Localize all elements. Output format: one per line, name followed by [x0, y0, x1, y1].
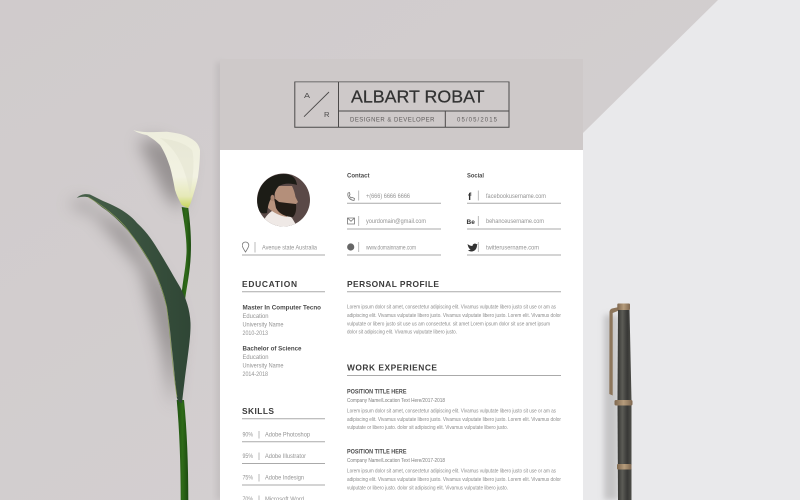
job two: adipiscing elit. Vivamus vulputate libero justo. Vivamus vulputate libero justo. Lorem elit. Vivamus dolor [347, 477, 561, 483]
date: 05/05/2015 [457, 118, 498, 124]
pen lower band [617, 464, 632, 470]
contact column [347, 172, 441, 255]
job one: POSITION TITLE HERE [347, 388, 406, 395]
degree two [242, 345, 302, 378]
facebook row [467, 190, 561, 203]
monogram slash [304, 92, 329, 117]
pen shadow [604, 315, 618, 500]
skill: photoshop: Adobe Photoshop [265, 431, 311, 438]
degree one: 2010-2013 [242, 330, 268, 337]
degree two: University Name [242, 362, 284, 370]
job two: Lorem ipsum dolor sit amet, consectetur adipiscing elit. Vivamus vulputate libero justo sit use or am as [347, 469, 556, 475]
skill: indesign: 75% [242, 475, 253, 482]
profile heading: PERSONAL PROFILE [347, 279, 439, 289]
address divider [254, 242, 256, 252]
icon: facebook: f [468, 192, 472, 203]
lily blossom fold [160, 138, 193, 195]
skills heading: SKILLS [242, 406, 274, 416]
degree two: Education [242, 354, 269, 361]
degree two: Bachelor of Science [242, 345, 302, 352]
social heading: Social [467, 172, 484, 180]
job two [347, 449, 561, 491]
pen body [618, 309, 632, 500]
lily leaf rim [88, 197, 177, 397]
lily stem lower [177, 400, 188, 500]
resume sheet [216, 59, 583, 500]
icon: map pin [242, 242, 249, 252]
profile paragraph: vulputate or libero justo sit use us am consectetur. sit amet Lorem ipsum dolor sit use amet ipsum [347, 321, 550, 327]
lily leaf [77, 194, 191, 403]
address text: Avenue state Australia [262, 244, 317, 252]
neck [268, 198, 287, 217]
icon: phone [348, 192, 354, 200]
degree one: Master In Computer Tecno [242, 304, 321, 311]
personal profile section [347, 279, 561, 336]
icon: twitter [468, 244, 478, 252]
skill: indesign: Adobe Indesign [265, 475, 304, 482]
face [274, 186, 298, 204]
skill: word [242, 496, 305, 500]
job two: POSITION TITLE HERE [347, 449, 406, 456]
skill: photoshop [242, 431, 325, 442]
contact heading: Contact [347, 172, 370, 180]
work experience section [347, 362, 561, 491]
degree two: 2014-2018 [242, 371, 268, 378]
shoulder [264, 211, 296, 226]
website: www.domainname.com [365, 244, 416, 252]
job one: Lorem ipsum dolor sit amet, consectetur adipiscing elit. Vivamus vulputate libero justo sit use or am as [347, 408, 556, 414]
degree one: University Name [242, 322, 284, 328]
job one: Company Name/Location Text Here/2017-2018 [347, 398, 445, 404]
pen [604, 304, 632, 500]
plate frame [295, 82, 509, 127]
behance row [466, 216, 561, 229]
job one [347, 388, 561, 431]
education section [242, 279, 325, 378]
twitter name: twitterusername.com [486, 244, 539, 252]
lily blossom [133, 130, 200, 208]
lily stem upper [181, 207, 191, 304]
profile paragraph: dolor sit adipiscing elit. Vivamus vulputate libero justo. [347, 330, 457, 336]
icon: globe [347, 243, 354, 251]
pen clip [609, 307, 619, 396]
skill: photoshop: 90% [242, 431, 253, 438]
sheet shadow [216, 62, 224, 500]
monogram R: R [324, 112, 330, 119]
beard [274, 198, 296, 217]
sheet body [220, 59, 583, 500]
address row [242, 242, 325, 255]
job one: adipiscing elit. Vivamus vulputate libero justo. Vivamus vulputate libero justo. Lorem elit. Vivamus dolor [347, 417, 561, 423]
role: DESIGNER & DEVELOPER [350, 118, 435, 124]
lily shadow [68, 138, 189, 409]
lily flower [68, 130, 200, 500]
profile paragraph [347, 304, 561, 336]
photo backdrop [257, 174, 310, 226]
name plate [295, 82, 509, 127]
ear [270, 195, 274, 201]
profile photo [257, 174, 310, 226]
behance name: behanceusername.com [486, 218, 544, 225]
job two: Company Name/Location Text Here/2017-2018 [347, 458, 445, 464]
skill: illustrator: Adobe Illustrator [265, 453, 306, 460]
pen centre band [614, 400, 632, 406]
degree one: Education [242, 313, 269, 320]
phone number: +(666) 6666 6666 [366, 193, 410, 200]
degree one [242, 304, 321, 337]
sheet content [242, 82, 561, 500]
profile paragraph: adipiscing elit. Vivamus vulputate libero justo. Vivamus vulputate libero justo. Lorem elit. Vivamus dolor [347, 313, 561, 319]
skill: illustrator: 95% [242, 453, 253, 460]
email address: yourdomain@gmail.com [366, 218, 426, 225]
job one: vulputate or libero justo. dolor sit adipiscing elit. Vivamus vulputate libero justo. [347, 425, 508, 431]
icon: behance: Be [466, 219, 475, 226]
education heading: EDUCATION [242, 279, 297, 289]
header band [220, 59, 583, 150]
pen cap ring [617, 304, 630, 310]
job two: vulputate or libero justo. dolor sit adipiscing elit. Vivamus vulputate libero justo. [347, 485, 508, 491]
work heading: WORK EXPERIENCE [347, 362, 437, 372]
hair [257, 174, 297, 213]
profile paragraph: Lorem ipsum dolor sit amet, consectetur adipiscing elit. Vivamus vulputate libero justo sit use or am as [347, 304, 556, 310]
facebook name: facebookusername.com [486, 193, 546, 200]
skills section [242, 406, 325, 500]
icon: envelope [348, 218, 354, 224]
name: ALBART ROBAT [351, 87, 485, 107]
skill: illustrator [242, 452, 325, 464]
address rule [242, 254, 325, 256]
monogram A: A [304, 93, 310, 100]
background: light diagonal panel [583, 0, 800, 500]
social column [466, 172, 561, 255]
skill: indesign [242, 474, 325, 485]
